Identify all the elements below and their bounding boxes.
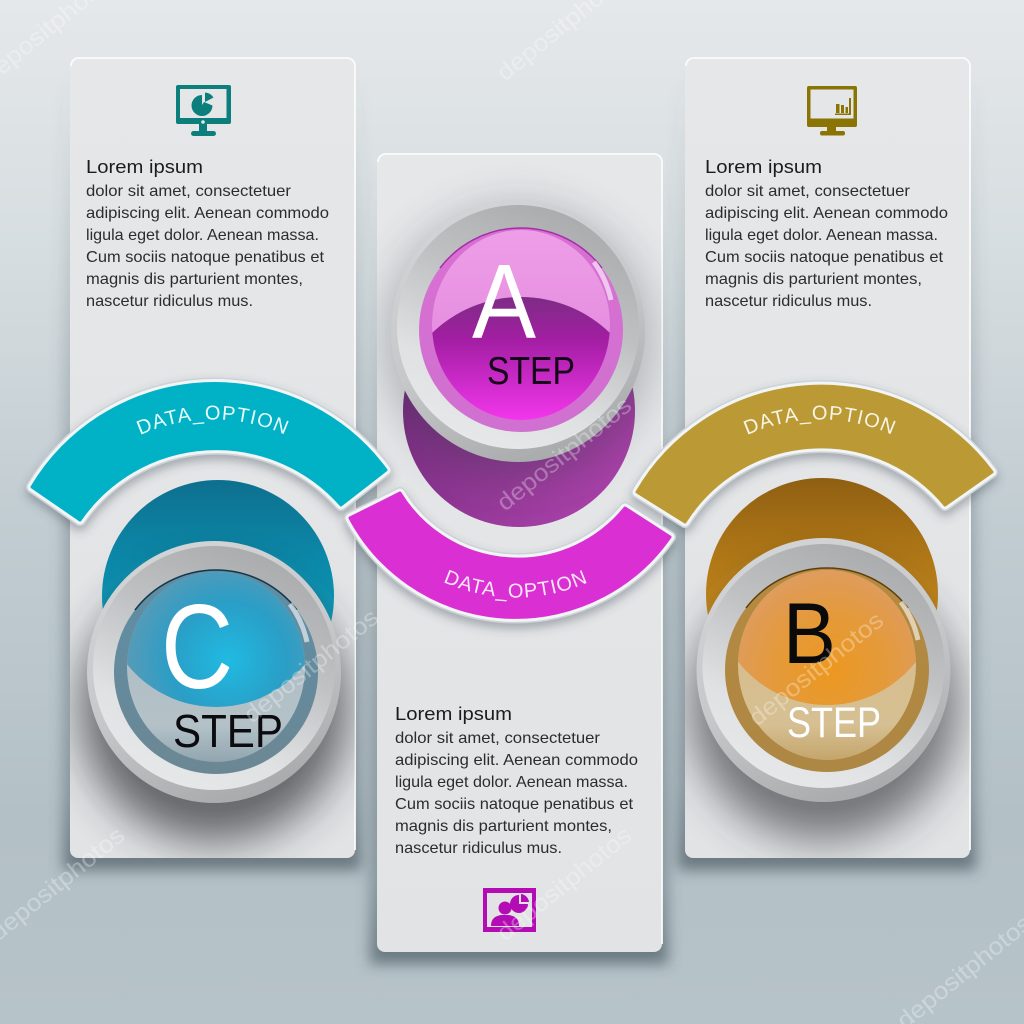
disc: purple backing of step A [403,295,635,527]
step A label: STEP [487,350,575,393]
panel: right card [678,57,976,870]
ribbon label: DATA_OPTION [444,570,586,602]
text block: right card: nascetur ridiculus mus. [705,293,872,310]
watermark: stock photo marks: depositphotos [492,822,637,947]
text block: left card [86,156,329,310]
ribbon: ochre data option [626,379,1002,538]
text block: middle card: nascetur ridiculus mus. [395,840,562,857]
watermark: stock photo marks: depositphotos [239,604,384,729]
step C button [87,541,341,803]
text block: middle card: dolor sit amet, consectetuer [395,730,601,747]
text block: middle card: Lorem ipsum [395,703,512,724]
step C label: STEP [173,705,283,757]
text block: right card: Cum sociis natoque penatibus et [705,249,944,266]
step C letter: C [161,580,233,714]
text block: right card: adipiscing elit. Aenean commodo [705,205,948,222]
shadow: under step C [80,574,348,842]
disc: ochre backing of step B [706,478,938,710]
step A letter: A [472,243,537,361]
text block: right card: Lorem ipsum [705,156,822,177]
step A button [393,205,645,462]
watermark: stock photo marks: depositphotos [492,392,637,517]
text block: right card: magnis dis parturient montes, [705,271,922,288]
panel: left card [63,57,361,870]
text block: right card: ligula eget dolor. Aenean massa. [705,227,938,244]
watermark: stock photo marks: depositphotos [744,607,889,732]
disc: teal backing of step C [102,480,334,712]
text block: middle card: ligula eget dolor. Aenean massa. [395,774,628,791]
icon: monitor with pie chart [176,85,231,136]
ribbon label: DATA_OPTION [743,406,896,434]
text block: right card [705,156,948,310]
shadow: under step A [384,206,652,474]
icon: presentation with person and pie chart [483,888,536,932]
text block: middle card: Cum sociis natoque penatibus et [395,796,634,813]
text block: left card: nascetur ridiculus mus. [86,293,253,310]
text block: middle card: adipiscing elit. Aenean commodo [395,752,638,769]
ribbon label: DATA_OPTION [136,406,289,434]
text block: left card: dolor sit amet, consectetuer [86,183,292,200]
icon: monitor with bar chart [807,86,857,136]
text block: left card: Lorem ipsum [86,156,203,177]
text block: left card: adipiscing elit. Aenean commodo [86,205,329,222]
ribbon: magenta data option [339,487,679,635]
shadow: under step B [690,572,958,840]
ribbon: teal data option [22,376,397,536]
text block: middle card [395,703,638,857]
panel: middle card [370,153,668,964]
text block: right card: dolor sit amet, consectetuer [705,183,911,200]
text block: middle card: magnis dis parturient montes, [395,818,612,835]
step B label: STEP [787,699,881,747]
text block: left card: ligula eget dolor. Aenean massa. [86,227,319,244]
text block: left card: magnis dis parturient montes, [86,271,303,288]
step B letter: B [783,585,836,682]
text block: left card: Cum sociis natoque penatibus et [86,249,325,266]
step B button [696,538,950,802]
